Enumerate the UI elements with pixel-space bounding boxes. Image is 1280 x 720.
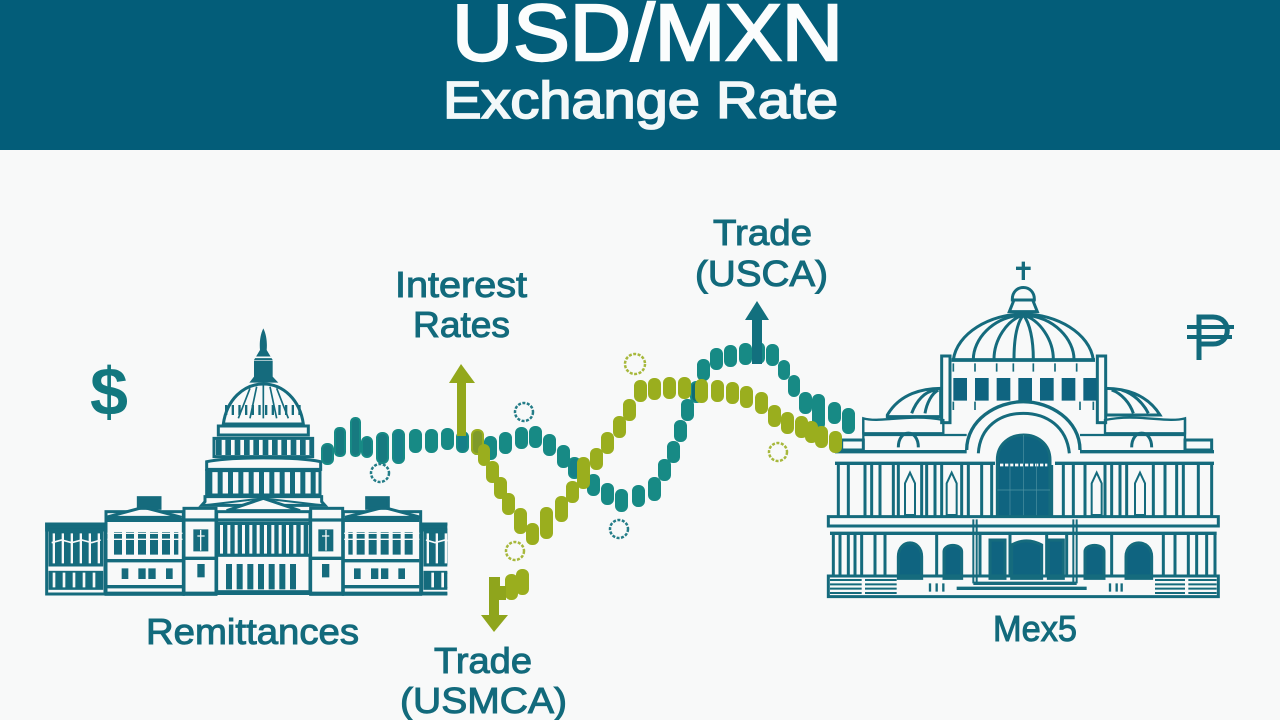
label: interest rates: Rates [413, 304, 510, 345]
capitol centre portico [106, 498, 447, 593]
palace middle cornice [828, 517, 1218, 583]
arrow: interest rates up [449, 364, 475, 436]
header banner [0, 0, 1280, 150]
label: trade USMCA: (USMCA) [400, 680, 567, 720]
capitol dome [202, 328, 325, 505]
label: trade USMCA: Trade [434, 640, 532, 681]
label: trade USCA [695, 212, 828, 294]
palace drum with windows [942, 356, 1106, 423]
small coin markers [371, 354, 787, 560]
capitol right half (mirrored) [309, 496, 448, 596]
capitol left half and central block [47, 498, 216, 594]
label: trade USMCA [400, 640, 567, 720]
icon: dollar sign: $ [90, 354, 128, 430]
palace base and steps [828, 576, 1218, 597]
label: interest rates: Interest [395, 264, 527, 305]
illustration: Palacio de Bellas Artes [828, 262, 1218, 597]
palace side domes [863, 388, 1185, 450]
label: trade USCA: (USCA) [695, 253, 828, 294]
illustration: US Capitol building [47, 328, 480, 594]
label: Mexico: Mex5 [993, 608, 1077, 649]
palace central arch and door [898, 402, 1152, 517]
chart: olive-green exchange-rate candlestick line [472, 378, 841, 599]
chart: teal exchange-rate candlestick line [322, 343, 854, 511]
arrow: trade USMCA down [481, 577, 508, 632]
subtitle: Exchange Rate [443, 72, 838, 130]
label: trade USCA: Trade [713, 212, 812, 253]
label: remittances: Remittances [146, 611, 359, 652]
label: interest rates [395, 264, 527, 345]
arrow: trade USCA up [745, 301, 769, 364]
palace upper facade [835, 440, 1214, 517]
palace ground floor [833, 535, 1215, 578]
icon: peso sign [1187, 317, 1234, 360]
palace dome [953, 262, 1093, 360]
